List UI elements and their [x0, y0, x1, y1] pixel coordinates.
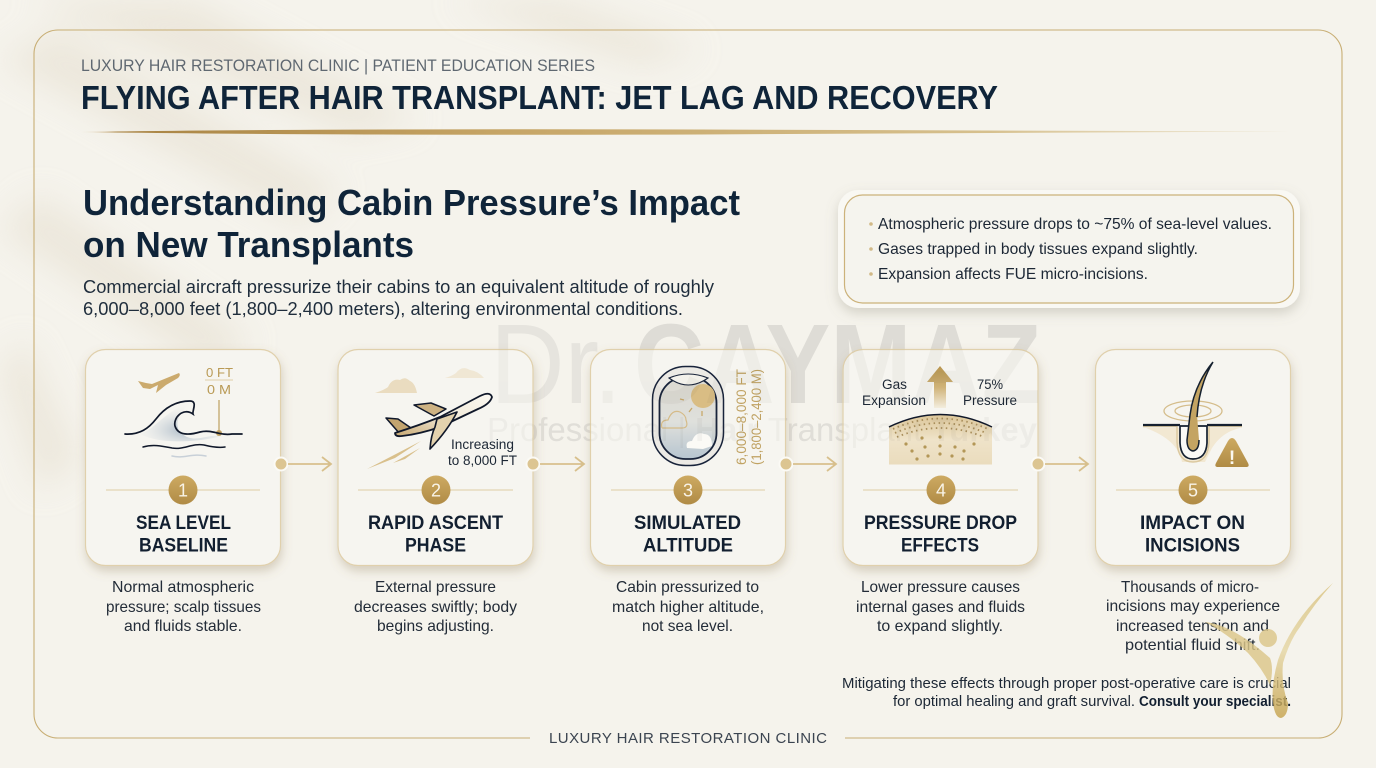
heading: SIMULATED	[634, 512, 741, 534]
watermark: Dr. Caymaz	[487, 301, 1041, 448]
heading: BASELINE	[139, 534, 228, 556]
step 5 description	[1106, 579, 1280, 654]
icon: aircraft window: (1,800–2,400 M)	[749, 369, 764, 465]
callout: key facts	[838, 190, 1300, 308]
arrow 2 to 3	[526, 457, 584, 471]
icon: hair follicle with warning: !	[1229, 448, 1235, 469]
badge 2	[422, 476, 450, 504]
icon: tissue dome with arrow: Pressure	[963, 393, 1017, 408]
icon: plane and wave: 0 FT	[206, 365, 233, 380]
closing note: Mitigating these effects through proper post-operative care is crucial	[842, 676, 1291, 692]
step 5 description: increased tension and	[1116, 618, 1269, 635]
step 4 description	[856, 579, 1025, 635]
step 4 description: internal gases and fluids	[856, 599, 1025, 616]
step 3 card: simulated altitude	[590, 350, 786, 566]
step 3 description	[612, 579, 764, 635]
step 3 description: not sea level.	[642, 618, 733, 635]
callout: key facts: Gases trapped in body tissues expand slightly.	[878, 241, 1198, 258]
heading	[136, 512, 231, 556]
watermark: Dr. Caymaz: CAYMAZ	[634, 301, 1041, 427]
arrow 1 to 2	[274, 457, 331, 471]
icon: plane and wave: 0 M	[207, 382, 231, 397]
watermark overlay across cards: Dr.	[490, 301, 622, 427]
heading: EFFECTS	[901, 534, 979, 556]
badge 2: 2	[431, 480, 441, 500]
step 5 description: incisions may experience	[1106, 598, 1280, 615]
icon: aircraft window: 6,000–8,000 FT	[734, 369, 749, 465]
badge 5: 5	[1188, 480, 1198, 500]
heading: INCISIONS	[1145, 534, 1240, 556]
section heading: Understanding Cabin Pressure’s Impact	[83, 182, 740, 223]
callout: key facts: Expansion affects FUE micro-incisions.	[878, 266, 1148, 283]
step 4 card: pressure drop effects	[843, 350, 1038, 566]
watermark: Dr. Caymaz: Dr.	[490, 301, 622, 427]
step 5 description: Thousands of micro-	[1121, 579, 1259, 596]
icon: aircraft window	[652, 366, 764, 466]
heading	[368, 512, 503, 556]
step 5 description: potential fluid shift.	[1125, 637, 1260, 654]
step 3 description: match higher altitude,	[612, 599, 764, 616]
icon: climbing plane: to 8,000 FT	[448, 453, 517, 468]
gold rule	[81, 129, 1290, 135]
badge 4: 4	[936, 480, 946, 500]
badge 5	[1178, 476, 1208, 504]
callout: key facts: Atmospheric pressure drops to ~75% of sea-level values.	[878, 216, 1272, 233]
step 2 card: rapid ascent phase	[338, 350, 533, 566]
badge 1: 1	[178, 480, 188, 500]
closing note: Consult your specialist.	[1139, 694, 1291, 710]
heading	[1140, 512, 1245, 556]
icon: tissue dome with arrow: 75%	[977, 377, 1003, 392]
step 3 description: Cabin pressurized to	[616, 579, 759, 596]
arrow 3 to 4	[780, 457, 836, 471]
step 1 description	[106, 579, 261, 635]
badge 1	[168, 476, 198, 504]
badge 3: 3	[683, 480, 693, 500]
heading: ALTITUDE	[643, 534, 733, 556]
step 4 description: Lower pressure causes	[861, 579, 1020, 596]
logo mark: gold figure	[1205, 583, 1333, 718]
step 1 description: Normal atmospheric	[112, 579, 254, 596]
step 2 description: External pressure	[375, 579, 496, 596]
heading: IMPACT ON	[1140, 512, 1245, 534]
badge 4	[926, 476, 956, 504]
heading: PHASE	[405, 534, 466, 556]
section heading: on New Transplants	[83, 224, 414, 265]
section heading	[83, 182, 740, 265]
icon: climbing plane: Increasing	[451, 437, 514, 452]
step 5 card: impact on incisions	[1096, 350, 1290, 566]
icon: tissue dome with arrow: Gas	[882, 377, 907, 392]
icon: plane and wave	[125, 365, 242, 457]
icon: tissue dome with arrow: Expansion	[862, 393, 926, 408]
heading: RAPID ASCENT	[368, 512, 503, 534]
watermark overlay across cards: CAYMAZ	[634, 301, 1041, 427]
heading	[864, 512, 1017, 556]
intro paragraph	[83, 276, 715, 319]
step 2 description: decreases swiftly; body	[354, 599, 517, 616]
heading: SEA LEVEL	[136, 512, 231, 534]
closing note	[842, 676, 1291, 710]
step 1 description: pressure; scalp tissues	[106, 599, 261, 616]
heading: PRESSURE DROP	[864, 512, 1017, 534]
step 2 description	[354, 579, 517, 635]
step 4 description: to expand slightly.	[877, 618, 1003, 635]
closing note: for optimal healing and graft survival.	[893, 694, 1135, 710]
step 2 description: begins adjusting.	[377, 618, 494, 635]
icon: climbing plane	[367, 368, 517, 469]
step 1 description: and fluids stable.	[124, 618, 242, 635]
badge 3	[674, 476, 702, 504]
watermark overlay across cards	[490, 350, 1037, 448]
heading	[634, 512, 741, 556]
step 1 card: sea level baseline	[86, 350, 280, 566]
header	[81, 56, 1290, 135]
watermark: Dr. Caymaz: Professional | Hair Transplant Turkey	[487, 411, 1038, 448]
title: FLYING AFTER HAIR TRANSPLANT: JET LAG AND RECOVERY	[81, 79, 998, 116]
arrow 4 to 5	[1032, 457, 1088, 471]
footer: LUXURY HAIR RESTORATION CLINIC	[549, 730, 827, 747]
icon: hair follicle with warning	[1143, 362, 1249, 469]
intro paragraph: Commercial aircraft pressurize their cabins to an equivalent altitude of roughly	[83, 276, 715, 297]
eyebrow: LUXURY HAIR RESTORATION CLINIC | PATIENT EDUCATION SERIES	[81, 56, 595, 75]
watermark overlay across cards: Professional | Hair Transplant Turkey	[487, 411, 1038, 448]
intro paragraph: 6,000–8,000 feet (1,800–2,400 meters), altering environmental conditions.	[83, 298, 683, 319]
icon: tissue dome with arrow	[862, 366, 1017, 464]
